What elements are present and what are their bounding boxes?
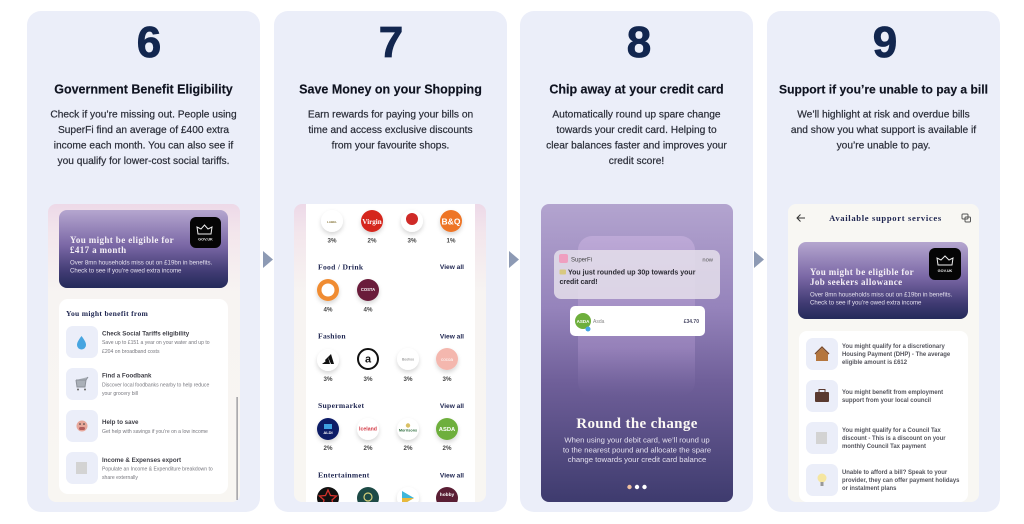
- panel: step 9 support if unable to pay: [767, 11, 1000, 512]
- transaction card: asda: [570, 306, 705, 336]
- row: top retailers: LABEL: [327, 220, 337, 224]
- list item: income and expenses export: Populate an Income & Expenditure breakdown to: [102, 466, 213, 472]
- step number 7: 7: [379, 18, 403, 67]
- banner: eligible for 417 a month: £417 a month: [70, 245, 127, 255]
- row: entertainment: [317, 472, 464, 502]
- row: fashion: 3%: [443, 376, 452, 383]
- row: food and drink: [317, 262, 464, 314]
- row: supermarket: 2%: [324, 445, 333, 452]
- row: top retailers: 2%: [368, 238, 377, 244]
- row: fashion: Fashion: [318, 332, 346, 340]
- list item: foodbank: your grocery bill: [102, 391, 138, 397]
- row: food and drink: COSTA: [361, 287, 375, 292]
- list item: foodbank: Discover local foodbanks nearby to help reduce: [102, 382, 209, 388]
- row: top retailers: B&Q: [442, 216, 461, 226]
- list item: social tariffs: [66, 326, 210, 358]
- transaction card: asda: Asda: [593, 319, 605, 325]
- notification: rounded up 30p: SuperFi: [571, 258, 592, 264]
- row: top retailers: 1%: [447, 238, 456, 244]
- list item: employment support: You might benefit from employment: [842, 390, 943, 396]
- body text: step 9: [791, 110, 976, 152]
- list item: social tariffs: Check Social Tariffs eligibility: [102, 330, 190, 338]
- list item: help to save: Get help with savings if you’re on a low income: [102, 429, 208, 435]
- body text: step 6: income each month. You can also see if: [54, 140, 233, 152]
- row: supermarket: 2%: [364, 445, 373, 452]
- list item: foodbank: [66, 368, 209, 400]
- icon: gov.uk badge: GOV.UK: [198, 238, 213, 242]
- list item: afford a bill: or instalment plans: [842, 486, 897, 492]
- banner: job seekers allowance: You might be eligible for: [810, 267, 914, 277]
- step number 6: 6: [137, 18, 161, 67]
- list item: afford a bill: provider, they can offer payment holidays: [842, 478, 960, 484]
- body text: step 9: you’re unable to pay.: [837, 140, 930, 152]
- body text: step 6: SuperFi find an average of £400 extra: [58, 125, 229, 136]
- card: support list: [799, 331, 968, 502]
- row: supermarket: 2%: [404, 445, 413, 452]
- arrow: 6 to 7: [263, 251, 273, 268]
- list item: social tariffs: Save up to £151 a year on your water and up to: [102, 340, 210, 346]
- list item: income and expenses export: Income & Expenses export: [102, 457, 181, 464]
- row: entertainment: Entertainment: [318, 470, 370, 480]
- description: round the change: change towards your credit card balance: [568, 455, 706, 464]
- notification: rounded up 30p: You just rounded up 30p towards your: [568, 270, 696, 276]
- row: supermarket: [317, 401, 464, 452]
- body text: step 8: Automatically round up spare change: [552, 110, 721, 120]
- banner: eligible for 417 a month: You might be eligible for: [70, 235, 174, 245]
- heading: round the change: Round the change: [576, 416, 698, 432]
- description: round the change: to the nearest pound and allocate the spare: [563, 446, 711, 454]
- banner: eligible for 417 a month: [59, 210, 228, 288]
- step number 8: 8: [627, 18, 651, 67]
- body text: step 6: you qualify for lower-cost social tariffs.: [58, 156, 229, 167]
- list item: afford a bill: [806, 464, 960, 496]
- heading: chip away at your credit card: Chip away at your credit card: [549, 82, 724, 96]
- row: food and drink: 4%: [324, 306, 333, 314]
- list item: council tax: You might qualify for a Council Tax: [842, 428, 941, 434]
- list item: afford a bill: Unable to afford a bill? Speak to your: [842, 470, 948, 476]
- body text: step 8: towards your credit card. Helping to: [556, 125, 717, 136]
- row: supermarket: View all: [440, 403, 464, 410]
- list item: council tax: [806, 422, 946, 454]
- list item: help to save: Help to save: [102, 419, 139, 426]
- notification: rounded up 30p: now: [702, 258, 714, 264]
- icon: gov.uk badge: [190, 217, 221, 248]
- row: top retailers: 3%: [328, 238, 337, 244]
- list item: employment support: [806, 380, 943, 412]
- row: supermarket: ALDI: [323, 430, 333, 435]
- row: food and drink: View all: [440, 264, 464, 271]
- panel: step 8 chip away at credit card: [520, 11, 753, 512]
- list item: housing payment: You might qualify for a discretionary: [842, 344, 946, 350]
- row: fashion: a: [365, 354, 372, 366]
- banner: job seekers allowance: Job seekers allowance: [810, 277, 902, 287]
- list item: council tax: discount - This is a discount on your: [842, 436, 946, 442]
- list item: income and expenses export: [66, 452, 213, 484]
- row: top retailers: 3%: [408, 238, 417, 244]
- body text: step 8: credit score!: [609, 156, 664, 167]
- list item: employment support: support from your local council: [842, 398, 931, 404]
- body text: step 7: from your favourite shops.: [332, 140, 449, 152]
- card: you might benefit from: You might benefit from: [66, 309, 149, 318]
- row: supermarket: Morrisons: [399, 428, 417, 432]
- row: entertainment: hobby: [440, 492, 455, 498]
- body text: step 6: [50, 110, 237, 167]
- banner: job seekers allowance: Over 8mn households miss out on £19bn in benefits.: [810, 292, 953, 298]
- list item: housing payment: eligible amount is £612: [842, 360, 908, 366]
- heading: save money on your shopping: Save Money on your Shopping: [299, 82, 482, 96]
- row: fashion: Boohoo: [402, 358, 414, 362]
- banner: eligible for 417 a month: Over 8mn households miss out on £19bn in benefits.: [70, 260, 213, 266]
- transaction card: asda: £34.70: [684, 319, 699, 325]
- banner: job seekers allowance: [798, 242, 968, 319]
- phone screen: available support services: [788, 204, 979, 502]
- row: fashion: 3%: [324, 376, 333, 383]
- list item: income and expenses export: share externally: [102, 475, 138, 481]
- scrollbar: [236, 397, 238, 500]
- row: entertainment: View all: [440, 472, 464, 480]
- icon: gov.uk badge: GOV.UK: [938, 269, 953, 273]
- heading: support if unable to pay a bill: Support if you’re unable to pay a bill: [779, 82, 988, 96]
- banner: job seekers allowance: Check to see if you’re owed extra income: [810, 300, 922, 306]
- arrow: 7 to 8: [509, 251, 519, 268]
- notification: rounded up 30p: [554, 250, 720, 299]
- body text: step 7: [308, 110, 473, 152]
- list item: help to save: [66, 410, 208, 442]
- list item: housing payment: [806, 338, 951, 370]
- transaction card: asda: ASDA: [577, 319, 590, 324]
- description: round the change: [563, 436, 711, 464]
- heading: government benefit eligibility: Government Benefit Eligibility: [54, 82, 233, 96]
- phone screen: shop rewards: [294, 204, 486, 509]
- row: supermarket: ASDA: [439, 427, 456, 433]
- body text: step 9: We’ll highlight at risk and overdue bills: [797, 110, 970, 120]
- row: supermarket: 2%: [443, 445, 452, 452]
- row: supermarket: Supermarket: [318, 401, 364, 410]
- body text: step 7: time and access exclusive discounts: [308, 125, 473, 136]
- row: fashion: cocoa: [441, 357, 453, 362]
- description: round the change: When using your debit card, we’ll round up: [564, 436, 710, 444]
- banner: eligible for 417 a month: Check to see if you’re owed extra income: [70, 268, 182, 274]
- step number 9: 9: [873, 18, 897, 67]
- card: you might benefit from: [59, 299, 228, 494]
- row: fashion: [317, 332, 464, 383]
- body text: step 9: and show you what support is available if: [791, 125, 976, 136]
- body text: step 6: Check if you’re missing out. People using: [50, 110, 237, 120]
- body text: step 8: [546, 110, 727, 167]
- list item: social tariffs: £204 on broadband costs: [102, 349, 160, 355]
- body text: step 8: clear balances faster and improves your: [546, 140, 727, 152]
- screen title: Available support services: [829, 213, 942, 223]
- row: food and drink: 4%: [364, 306, 373, 314]
- row: top retailers: [321, 210, 462, 244]
- row: top retailers: Virgin: [362, 218, 382, 226]
- list item: council tax: monthly Council Tax payment: [842, 444, 926, 450]
- list item: foodbank: Find a Foodbank: [102, 372, 152, 380]
- arrow: 8 to 9: [754, 251, 764, 268]
- notification: rounded up 30p: credit card!: [560, 279, 598, 286]
- panel: step 6 government benefit eligibility: [27, 11, 260, 512]
- row: fashion: 3%: [364, 376, 373, 383]
- panel: step 7 save money on shopping: [274, 11, 507, 512]
- pagination dots: [627, 485, 647, 489]
- icon: chat: [962, 214, 970, 222]
- list item: housing payment: Housing Payment (DHP) - The average: [842, 352, 951, 358]
- body text: step 7: Earn rewards for paying your bills on: [308, 110, 473, 120]
- phone screen: benefits: [48, 204, 240, 502]
- row: supermarket: Iceland: [359, 426, 377, 432]
- phone screen: round the change: [541, 204, 733, 502]
- icon: back arrow: [797, 214, 805, 222]
- row: food and drink: Food / Drink: [318, 262, 364, 272]
- row: fashion: 3%: [404, 376, 413, 383]
- row: fashion: View all: [440, 334, 464, 340]
- icon: gov.uk badge: [929, 248, 961, 280]
